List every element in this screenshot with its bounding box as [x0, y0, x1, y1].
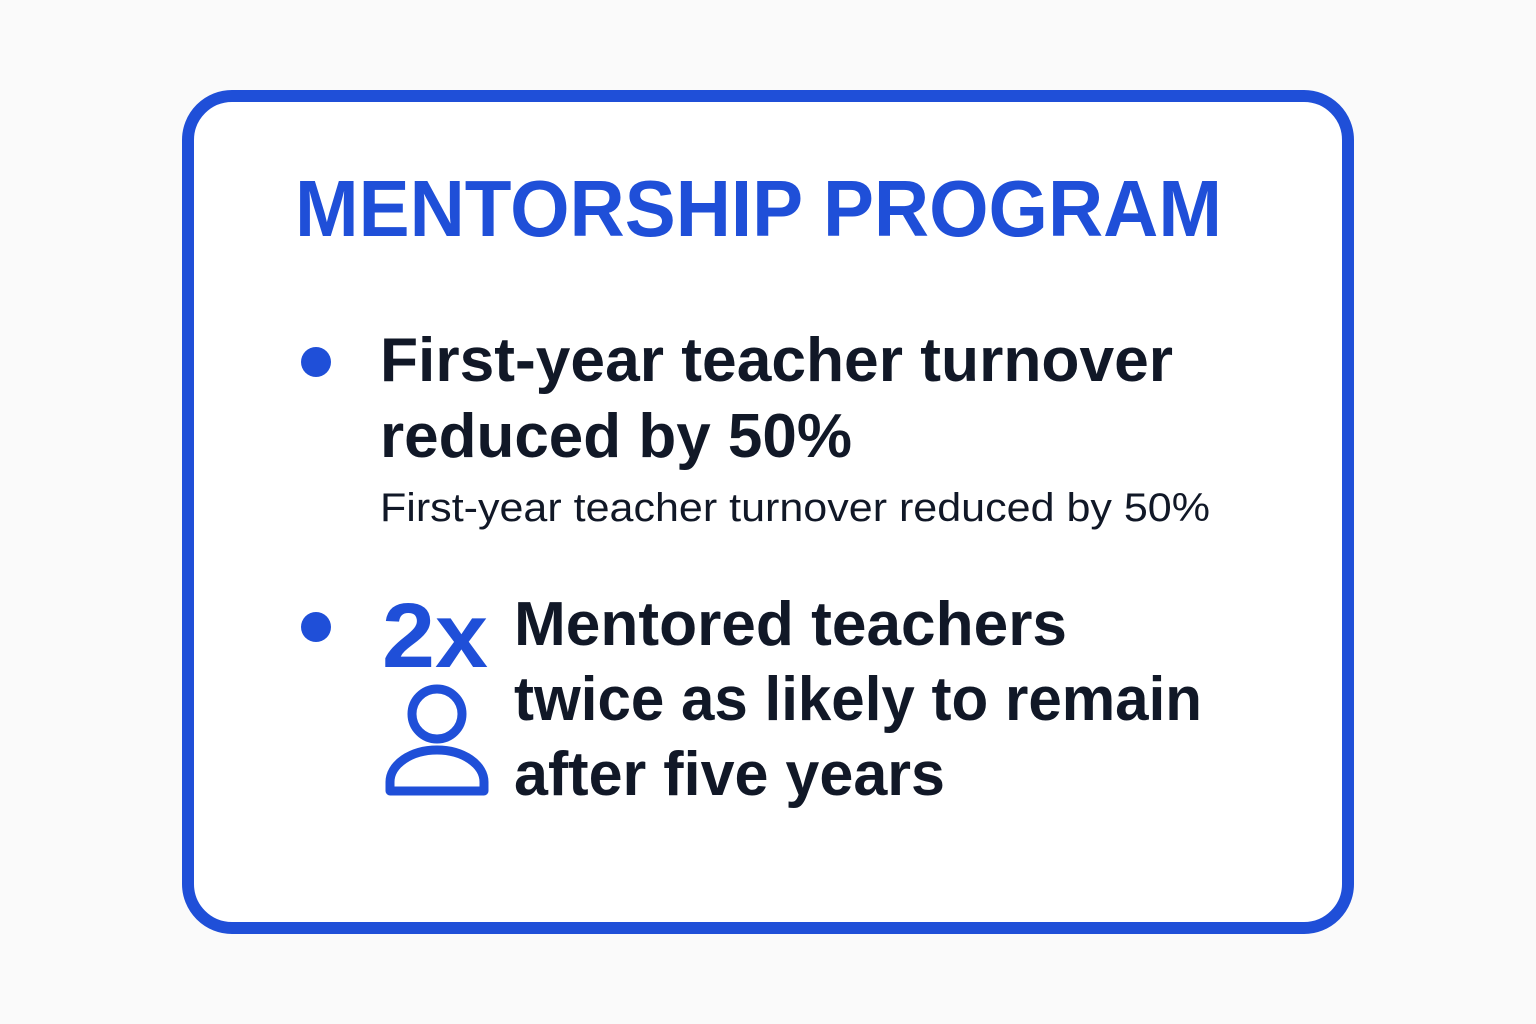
bullet 2 text: after five years: [514, 740, 945, 809]
bullet 1 heading: First-year teacher turnover: [380, 326, 1173, 395]
bullet dot 1: [301, 347, 331, 377]
bullet 1 heading: reduced by 50%: [380, 402, 852, 471]
title: MENTORSHIP PROGRAM: [295, 164, 1222, 253]
bullet 2 text: [514, 590, 1202, 809]
icon: person: [390, 689, 484, 791]
bullet 1 subtext: First-year teacher turnover reduced by 50%: [380, 486, 1210, 530]
bullet 1 heading: [380, 326, 1173, 471]
panel: mentorship card: [188, 96, 1348, 928]
stat: 2x: 2x: [382, 585, 488, 687]
bullet 2 text: twice as likely to remain: [514, 665, 1202, 734]
bullet 2 text: Mentored teachers: [514, 590, 1067, 659]
bullet dot 2: [301, 612, 331, 642]
bullet 1: [301, 326, 1210, 530]
bullet 2: [301, 585, 1202, 809]
